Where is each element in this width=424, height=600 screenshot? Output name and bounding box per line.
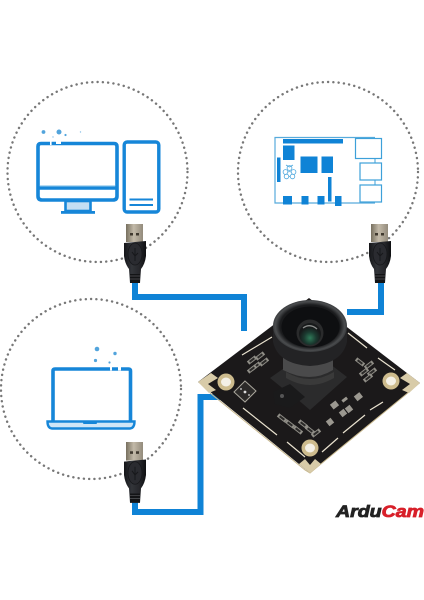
icon: raspberry logo <box>283 165 296 179</box>
circuit board <box>198 298 420 473</box>
cable: desktop to camera <box>135 280 244 331</box>
board components <box>234 351 377 438</box>
logo: ArduCam: Ardu Cam <box>335 503 424 521</box>
panel: Raspberry Pi circle <box>238 82 418 262</box>
cable: laptop to camera <box>135 397 232 512</box>
icon: Raspberry Pi board <box>275 138 382 206</box>
USB plug: Raspberry Pi <box>369 224 391 283</box>
USB plug: desktop <box>124 224 146 283</box>
camera module <box>198 298 420 473</box>
dotted circle: laptop <box>1 299 181 479</box>
lens front <box>273 300 347 352</box>
dotted circle: Raspberry Pi <box>238 82 418 262</box>
lens holder <box>270 364 347 410</box>
panel: laptop circle <box>1 299 181 479</box>
dotted circle: desktop <box>8 82 188 262</box>
icon: laptop <box>48 347 134 428</box>
panel: desktop computer circle <box>8 82 188 262</box>
USB plug: laptop <box>124 442 146 503</box>
lens barrel <box>283 352 333 377</box>
icon: desktop tower <box>124 142 159 212</box>
cable: Raspberry Pi to camera <box>347 280 381 312</box>
icon: desktop monitor <box>38 130 117 214</box>
